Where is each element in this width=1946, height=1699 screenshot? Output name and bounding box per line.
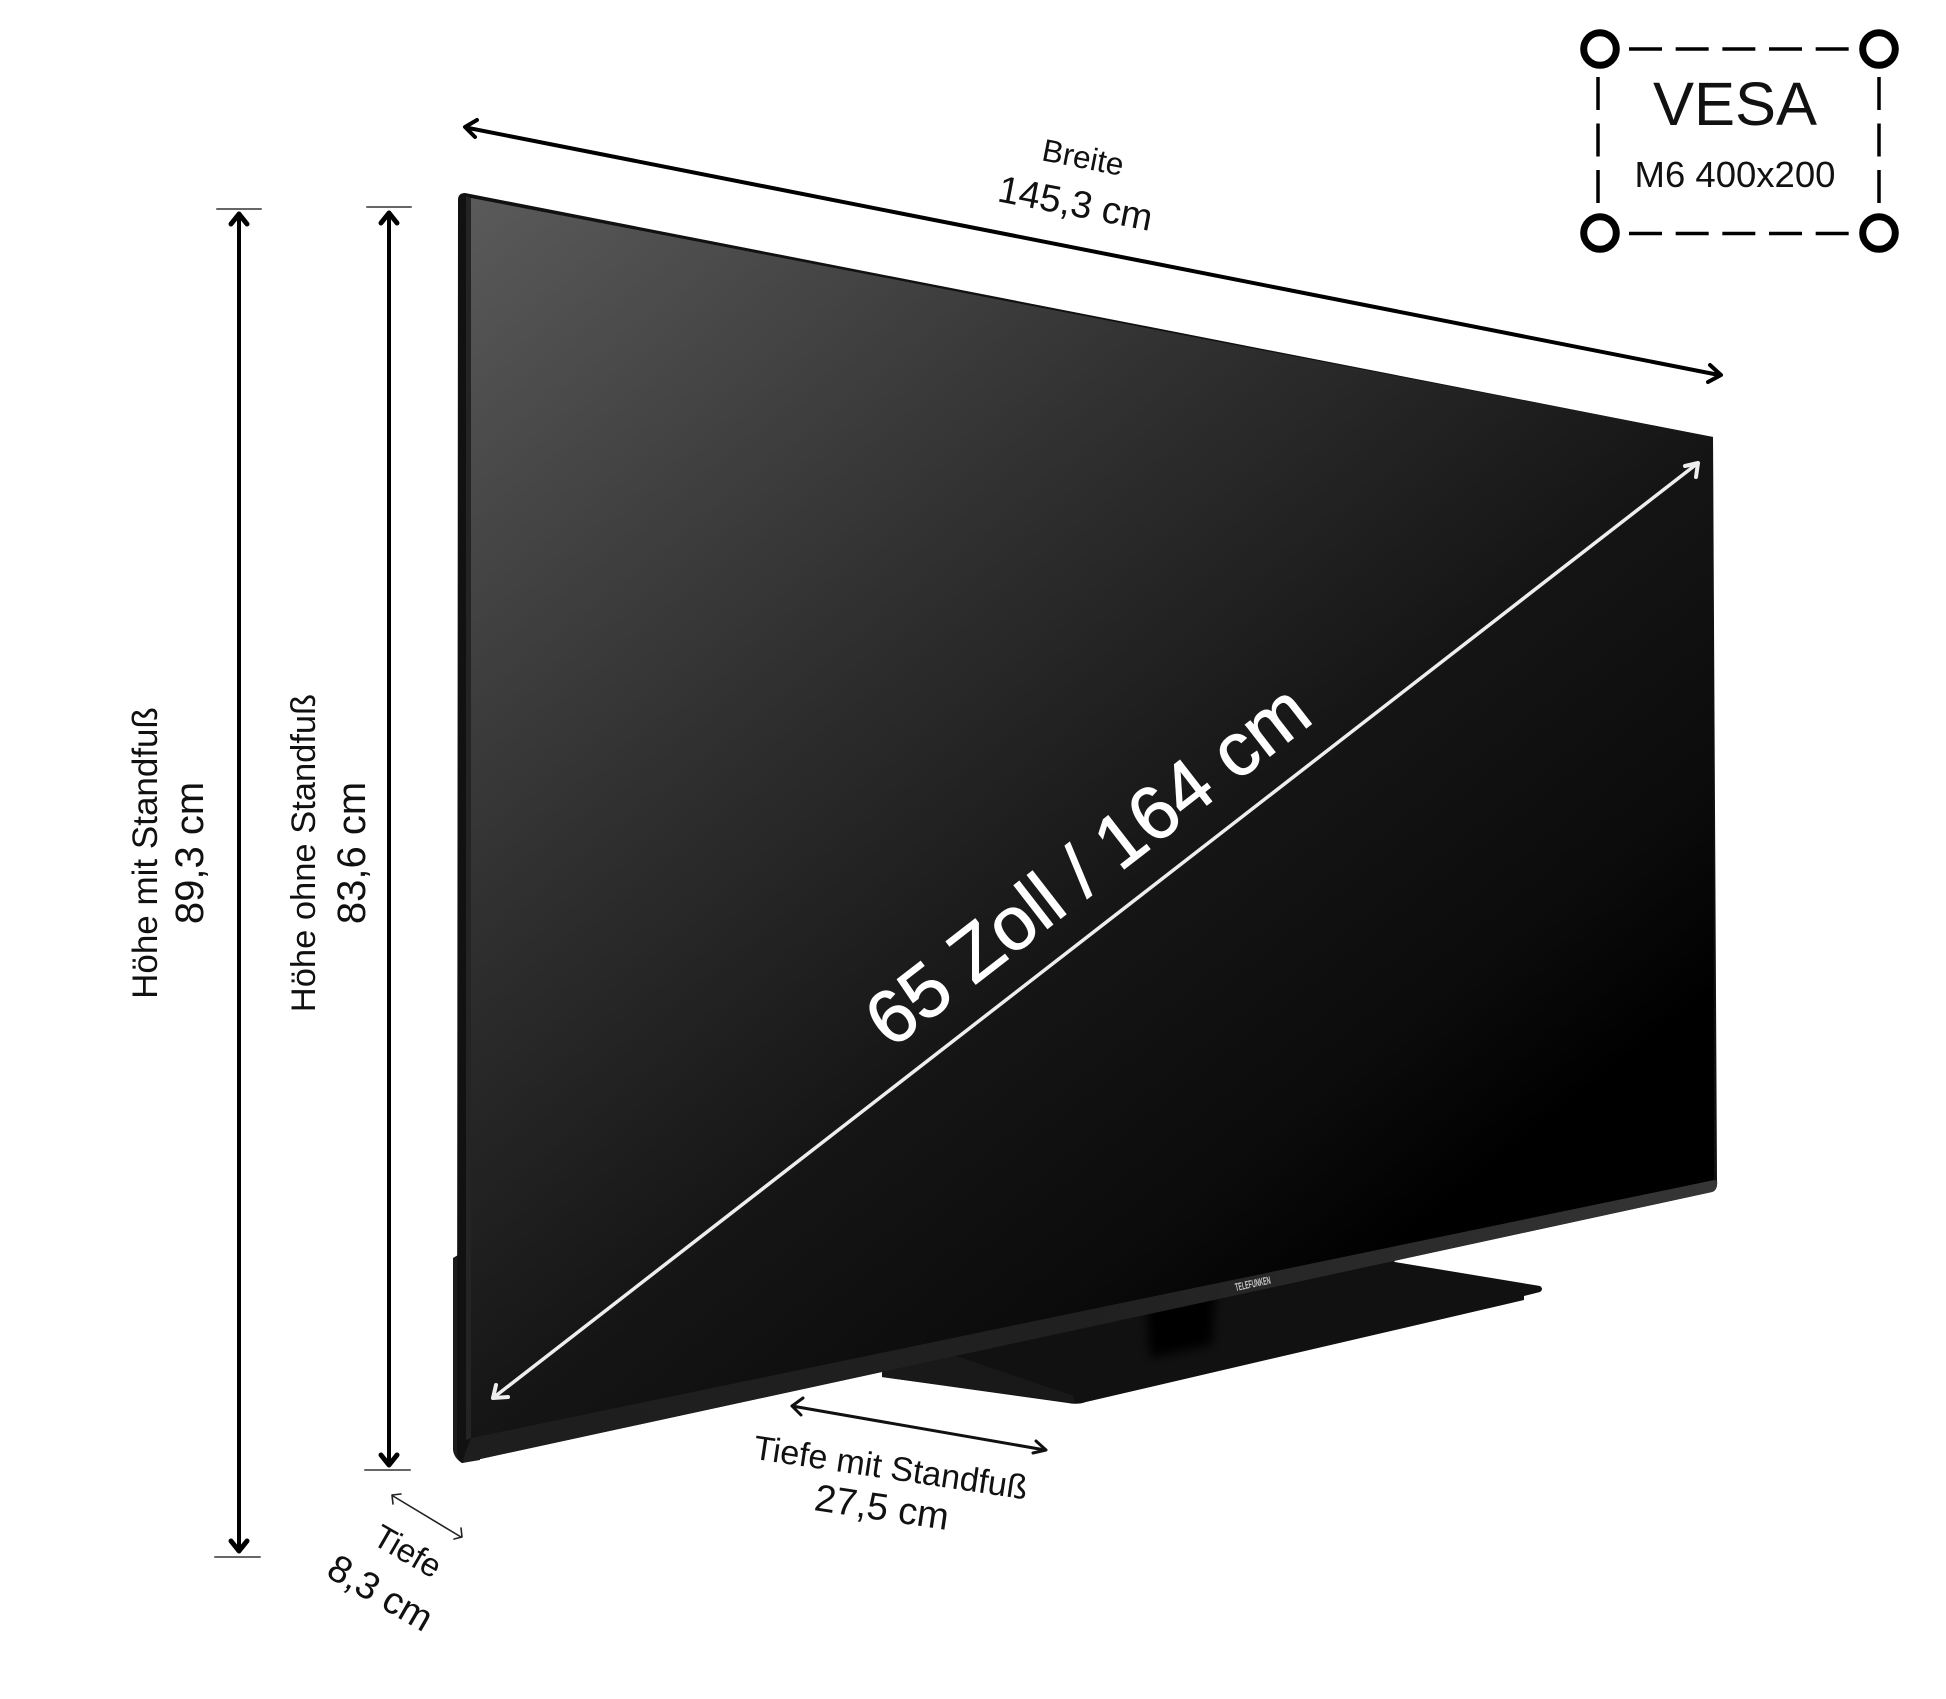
depth label: 8,3 cm [320,1547,440,1640]
height without stand label: 83,6 cm [330,782,374,924]
width label [995,132,1156,240]
diagonal size label: 65 Zoll / 164 cm [849,667,1325,1063]
height without stand arrow [365,207,411,1470]
screen [471,198,1714,1438]
VESA diagram [1584,33,1895,249]
VESA specification: M6 400x200 [1635,154,1835,195]
depth with stand label: Tiefe mit Standfuß [751,1429,1030,1507]
bottom bezel [462,1180,1717,1463]
diagonal arrow [493,463,1698,1398]
mounting holes [1584,33,1895,249]
depth arrow [392,1494,462,1539]
VESA heading: VESA [1653,70,1817,139]
stand front face [882,1355,1074,1403]
TV stand [882,1250,1542,1404]
height with stand label: Höhe mit Standfuß [126,707,165,999]
stand base plate [882,1250,1542,1404]
depth with stand label: 27,5 cm [812,1477,952,1539]
depth label: Tiefe [367,1517,448,1585]
left bezel highlight [466,196,471,1440]
height with stand label: 89,3 cm [168,782,212,924]
television [453,193,1717,1463]
height without stand label [285,694,374,1012]
mounting pattern dashes [1598,49,1879,234]
depth with stand arrow [792,1398,1046,1453]
width arrow [465,120,1721,382]
width label: Breite [1039,132,1127,183]
rear housing bump [453,1255,480,1463]
logo: TELEFUNKEN [1234,1275,1272,1294]
height with stand label [126,707,212,999]
height without stand label: Höhe ohne Standfuß [285,694,323,1012]
width label: 145,3 cm [995,169,1156,240]
TV frame [457,193,1717,1463]
stand neck [1146,1286,1216,1358]
height with stand arrow [215,209,261,1557]
